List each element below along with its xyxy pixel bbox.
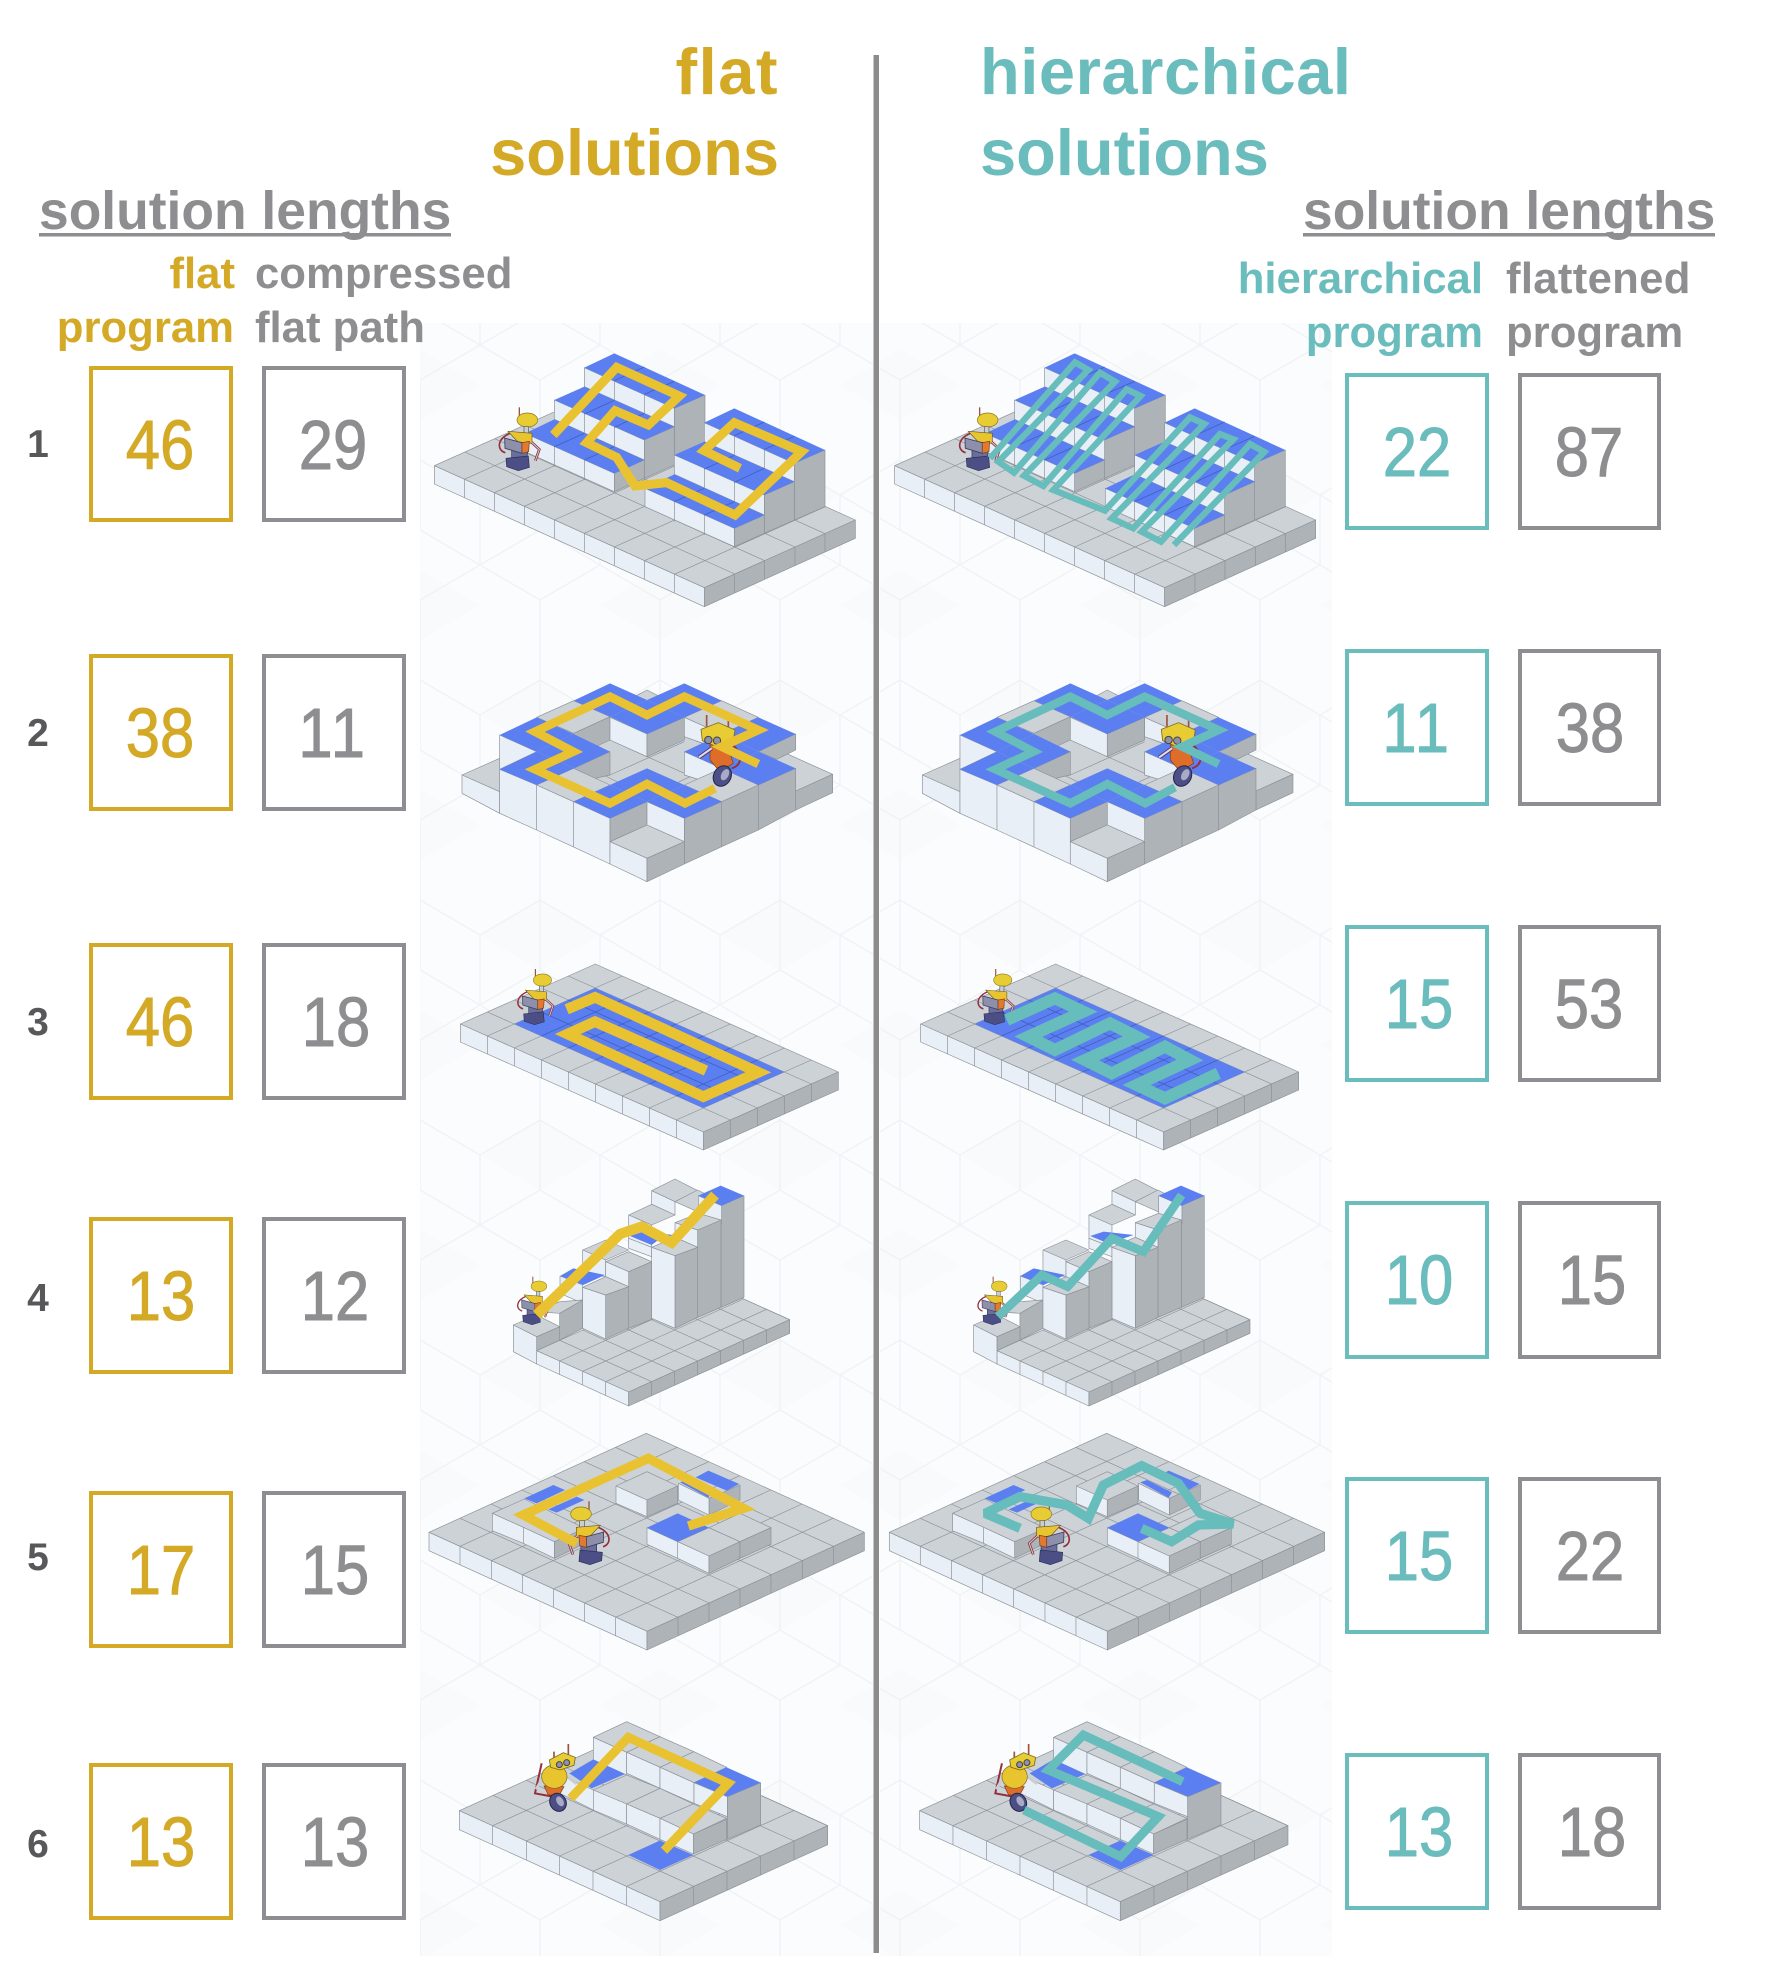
- heading: solution lengths left: solution lengths: [39, 182, 451, 241]
- left value boxes: compressed flat path: 11: [298, 693, 368, 772]
- row numbers: 2: [27, 712, 49, 755]
- scene 5 hierarchical: stage: [889, 1433, 1325, 1650]
- title: hierarchical solutions: solutions: [980, 116, 1269, 189]
- right value boxes: hierarchical program: 15: [1385, 1516, 1453, 1595]
- column label: flat program: flat: [169, 249, 235, 298]
- column label: compressed flat path: compressed: [255, 249, 512, 298]
- row numbers: 1: [27, 423, 49, 466]
- right value boxes: flattened program: 22: [1556, 1516, 1624, 1595]
- column label: hierarchical program: hierarchical: [1238, 254, 1483, 303]
- right value boxes: flattened program: 18: [1558, 1792, 1626, 1871]
- scene 3 hierarchical: stage: [921, 964, 1299, 1150]
- left value boxes: compressed flat path: 12: [301, 1256, 369, 1335]
- left value boxes: compressed flat path: 18: [302, 982, 370, 1061]
- scene 5 hierarchical: teal path: [985, 1466, 1233, 1542]
- title: flat solutions: flat: [676, 35, 779, 108]
- column label: flattened program: flattened: [1506, 254, 1691, 303]
- left value boxes: compressed flat path: 15: [301, 1530, 369, 1609]
- scene 6 hierarchical: stage: [920, 1722, 1288, 1921]
- column label: flat program: program: [57, 303, 234, 352]
- scene 3 flat: flat grid with blue area: [460, 964, 838, 1150]
- scene 1 hierarchical: stage: [895, 353, 1316, 607]
- left value boxes: flat program: 13: [127, 1256, 195, 1335]
- scene 1 flat: yellow solution path: [553, 367, 802, 515]
- left value boxes: flat program: 13: [127, 1802, 195, 1881]
- scene 5 flat: floor with blocks: [429, 1433, 864, 1650]
- scene 3 flat: yellow solution path: [567, 997, 758, 1097]
- row numbers: 6: [27, 1823, 49, 1866]
- right value boxes: hierarchical program: 11: [1382, 688, 1452, 767]
- left value boxes: flat program: 17: [127, 1530, 195, 1609]
- right value boxes: hierarchical program: 15: [1385, 964, 1453, 1043]
- column label: flattened program: program: [1506, 308, 1683, 357]
- panel: flat solutions background: [420, 323, 873, 1956]
- scene 4 flat: staircase towers: [513, 1179, 790, 1406]
- left value boxes: flat program: 38: [126, 693, 194, 772]
- scene 2 hierarchical: stage: [922, 683, 1293, 882]
- right value boxes: flattened program: 38: [1556, 688, 1624, 767]
- title: hierarchical solutions: hierarchical: [980, 35, 1352, 108]
- panel: hierarchical solutions background: [880, 323, 1332, 1956]
- column label: hierarchical program: program: [1306, 308, 1483, 357]
- right value boxes: flattened program: 15: [1558, 1240, 1626, 1319]
- left value boxes: flat program: [91, 368, 231, 1918]
- scene 1 hierarchical: teal zigzag path: [990, 362, 1264, 545]
- left value boxes: flat program: 46: [126, 982, 194, 1061]
- row numbers: 4: [27, 1277, 49, 1320]
- right value boxes: flattened program: [1520, 375, 1659, 1908]
- scene 1 flat: double staircase: [434, 353, 855, 607]
- scene 5 flat: yellow solution path: [523, 1458, 743, 1543]
- row numbers: 5: [27, 1536, 49, 1579]
- scene 3 hierarchical: teal path: [1007, 998, 1218, 1098]
- icon: front-facing robot: [535, 1744, 577, 1814]
- left value boxes: compressed flat path: 13: [301, 1802, 369, 1881]
- right value boxes: flattened program: 53: [1555, 964, 1623, 1043]
- heading: solution lengths right: solution lengths: [1303, 182, 1715, 241]
- scene 4 hierarchical: teal path: [998, 1195, 1182, 1317]
- right value boxes: hierarchical program: 13: [1385, 1792, 1453, 1871]
- right value boxes: hierarchical program: [1347, 375, 1487, 1908]
- left value boxes: flat program: 46: [126, 405, 194, 484]
- scene 2 hierarchical: teal path: [995, 697, 1219, 803]
- scene 2 flat: ring platform: [462, 683, 833, 882]
- scene 6 flat: stepped wall: [459, 1722, 828, 1921]
- left value boxes: compressed flat path: 29: [299, 405, 367, 484]
- scene 6 flat: yellow solution path: [571, 1737, 728, 1851]
- right value boxes: flattened program: 87: [1555, 412, 1623, 491]
- right value boxes: hierarchical program: 22: [1383, 412, 1451, 491]
- scene 4 flat: yellow solution path: [537, 1195, 715, 1315]
- column label: compressed flat path: flat path: [255, 303, 425, 352]
- title: flat solutions: solutions: [490, 116, 779, 189]
- row numbers: [27, 423, 49, 1866]
- row numbers: 3: [27, 1001, 49, 1044]
- left value boxes: compressed flat path: [264, 368, 404, 1918]
- right value boxes: hierarchical program: 10: [1385, 1240, 1453, 1319]
- scene 6 hierarchical: teal path: [1024, 1735, 1183, 1857]
- scene 2 flat: yellow solution path: [535, 697, 758, 803]
- scene 4 hierarchical: stage: [974, 1179, 1250, 1406]
- center divider: [874, 55, 879, 1953]
